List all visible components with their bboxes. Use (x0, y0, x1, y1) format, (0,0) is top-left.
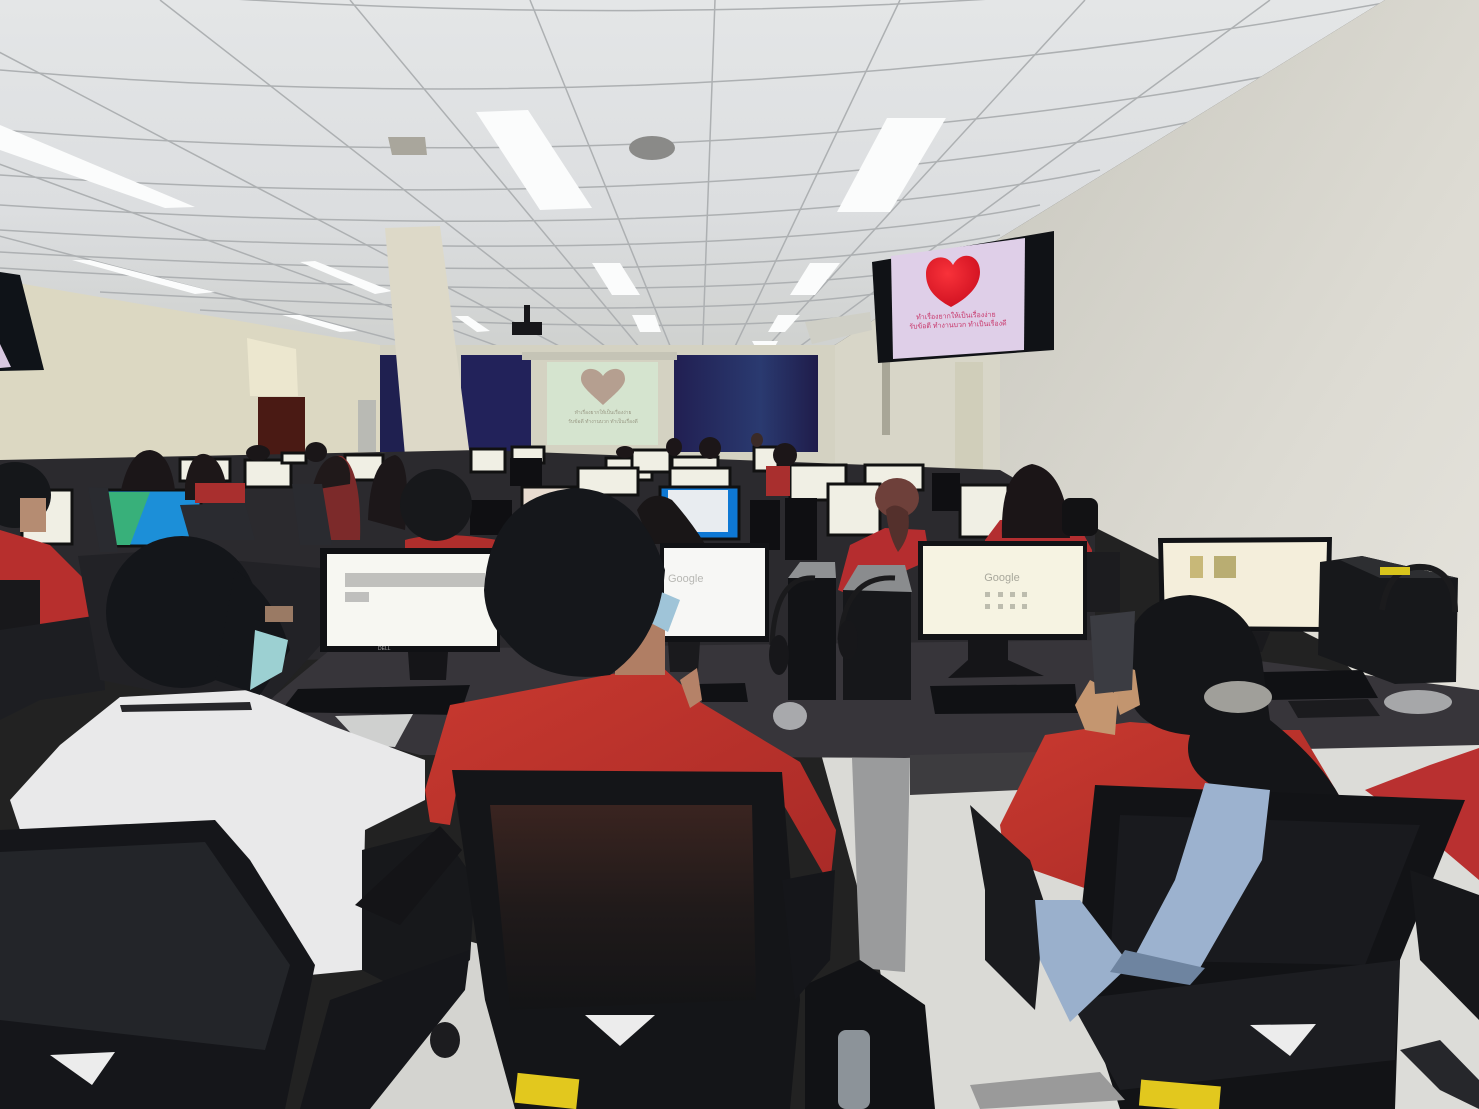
main desk (255, 640, 1479, 758)
student at right with phone (1000, 595, 1340, 890)
back rows of monitors (22, 447, 1008, 544)
front monitor: Google search right (918, 541, 1087, 678)
ceiling projector (512, 305, 542, 335)
front monitor: file explorer: DELL (378, 646, 391, 652)
right wall (1000, 0, 1479, 790)
front monitor: Google search centre: Google (668, 573, 703, 585)
projection screen: ทำเรื่องยากให้เป็นเรื่องง่าย (575, 408, 631, 416)
right wall TV (872, 231, 1054, 363)
side desk left (78, 552, 325, 712)
student at far right edge (1365, 748, 1479, 880)
floor centre under desks (820, 740, 1130, 1109)
left back chairs (88, 484, 332, 552)
left wall TV (0, 272, 44, 371)
air conditioner (805, 312, 872, 344)
far right chair and wheels (970, 870, 1479, 1109)
ceiling lights (0, 110, 946, 352)
bag on floor with water bottle (805, 960, 935, 1109)
mice, phone and tablet on desk (335, 690, 1452, 747)
floor between left and centre chairs (340, 930, 520, 1109)
blue desktop monitors (107, 487, 739, 546)
light blue backpack straps (1035, 783, 1270, 1022)
right wall TV: ทำเรื่องยากให้เป็นเรื่องง่าย (916, 310, 996, 321)
front monitor: Google search right: Google (984, 572, 1020, 584)
centre chair (452, 770, 835, 1109)
projection screen (522, 352, 677, 445)
ceiling (0, 0, 1385, 345)
PC towers centre (769, 562, 912, 700)
student in red shirt, centre (425, 488, 836, 885)
PC tower right with headset (1318, 556, 1458, 684)
floor right (1300, 740, 1479, 1109)
left chair (0, 820, 470, 1109)
ceiling fixtures: sensor and speaker (388, 136, 675, 160)
student behind centre monitor (637, 496, 705, 544)
front monitor: file explorer (320, 548, 500, 680)
student in white shirt (10, 536, 425, 975)
pillar (385, 226, 473, 490)
right wall TV: รับข้อดี ทำงานบวก ทำเป็นเรื่องดี (909, 318, 1007, 331)
front monitor: far right (1158, 537, 1332, 652)
left wall with window and door (0, 280, 380, 465)
front monitor: Google search centre (660, 543, 769, 672)
right chair (970, 785, 1465, 1109)
back room desks and floor (0, 450, 1095, 660)
student at right with long hair (985, 464, 1120, 612)
towers in back rows (470, 458, 960, 560)
desk leg and beam (852, 752, 1040, 972)
back wall (380, 238, 1000, 480)
student with ponytail (838, 478, 930, 595)
projection screen: รับข้อดี ทำงานบวก ทำเป็นเรื่องดี (568, 417, 638, 425)
curtains (380, 355, 818, 452)
student with curly hair (400, 469, 497, 549)
student at far left (0, 462, 105, 720)
keyboards (280, 670, 1378, 715)
back-row students (121, 433, 797, 540)
dark trousers of student in white shirt (362, 830, 475, 1000)
